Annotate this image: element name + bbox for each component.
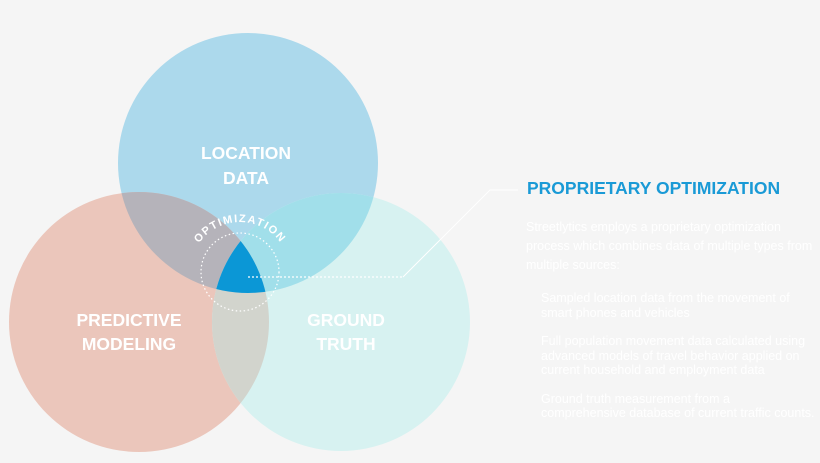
circle labels: GROUND — [307, 310, 385, 330]
optimization dotted ring — [201, 233, 279, 311]
title: PROPRIETARY OPTIMIZATION — [527, 178, 780, 198]
bullet list: Sampled location data from the movement of — [541, 291, 790, 305]
circle labels: TRUTH — [316, 334, 376, 354]
bullet list: Full population movement data calculated using — [541, 334, 805, 348]
description — [526, 220, 812, 272]
description: multiple sources: — [526, 258, 620, 272]
bullet list: Ground truth measurement from a — [541, 392, 730, 406]
bullet list — [541, 291, 815, 420]
description: Streetlytics employs a proprietary optimization — [526, 220, 781, 234]
circle labels: DATA — [223, 168, 269, 188]
description: process which combines data of multiple types from — [526, 239, 812, 253]
bullet list: comprehensive database of current traffic counts. — [541, 406, 815, 420]
bullet list: smart phones and vehicles — [541, 306, 690, 320]
circle labels: LOCATION — [201, 143, 291, 163]
circle: predictive modeling — [9, 192, 269, 452]
circle labels: PREDICTIVE — [76, 310, 182, 330]
bullet list: advanced models of travel behavior applied on — [541, 348, 800, 362]
circle: ground truth — [212, 193, 470, 451]
circle labels: MODELING — [82, 334, 176, 354]
circle: location data — [118, 33, 378, 293]
bullet list: current household and employment data — [541, 363, 765, 377]
optimization label: OPTIMIZATION — [194, 214, 286, 242]
connector line — [248, 190, 518, 277]
venn diagram — [9, 33, 518, 452]
circle labels — [76, 143, 385, 354]
overlap regions — [122, 192, 374, 403]
